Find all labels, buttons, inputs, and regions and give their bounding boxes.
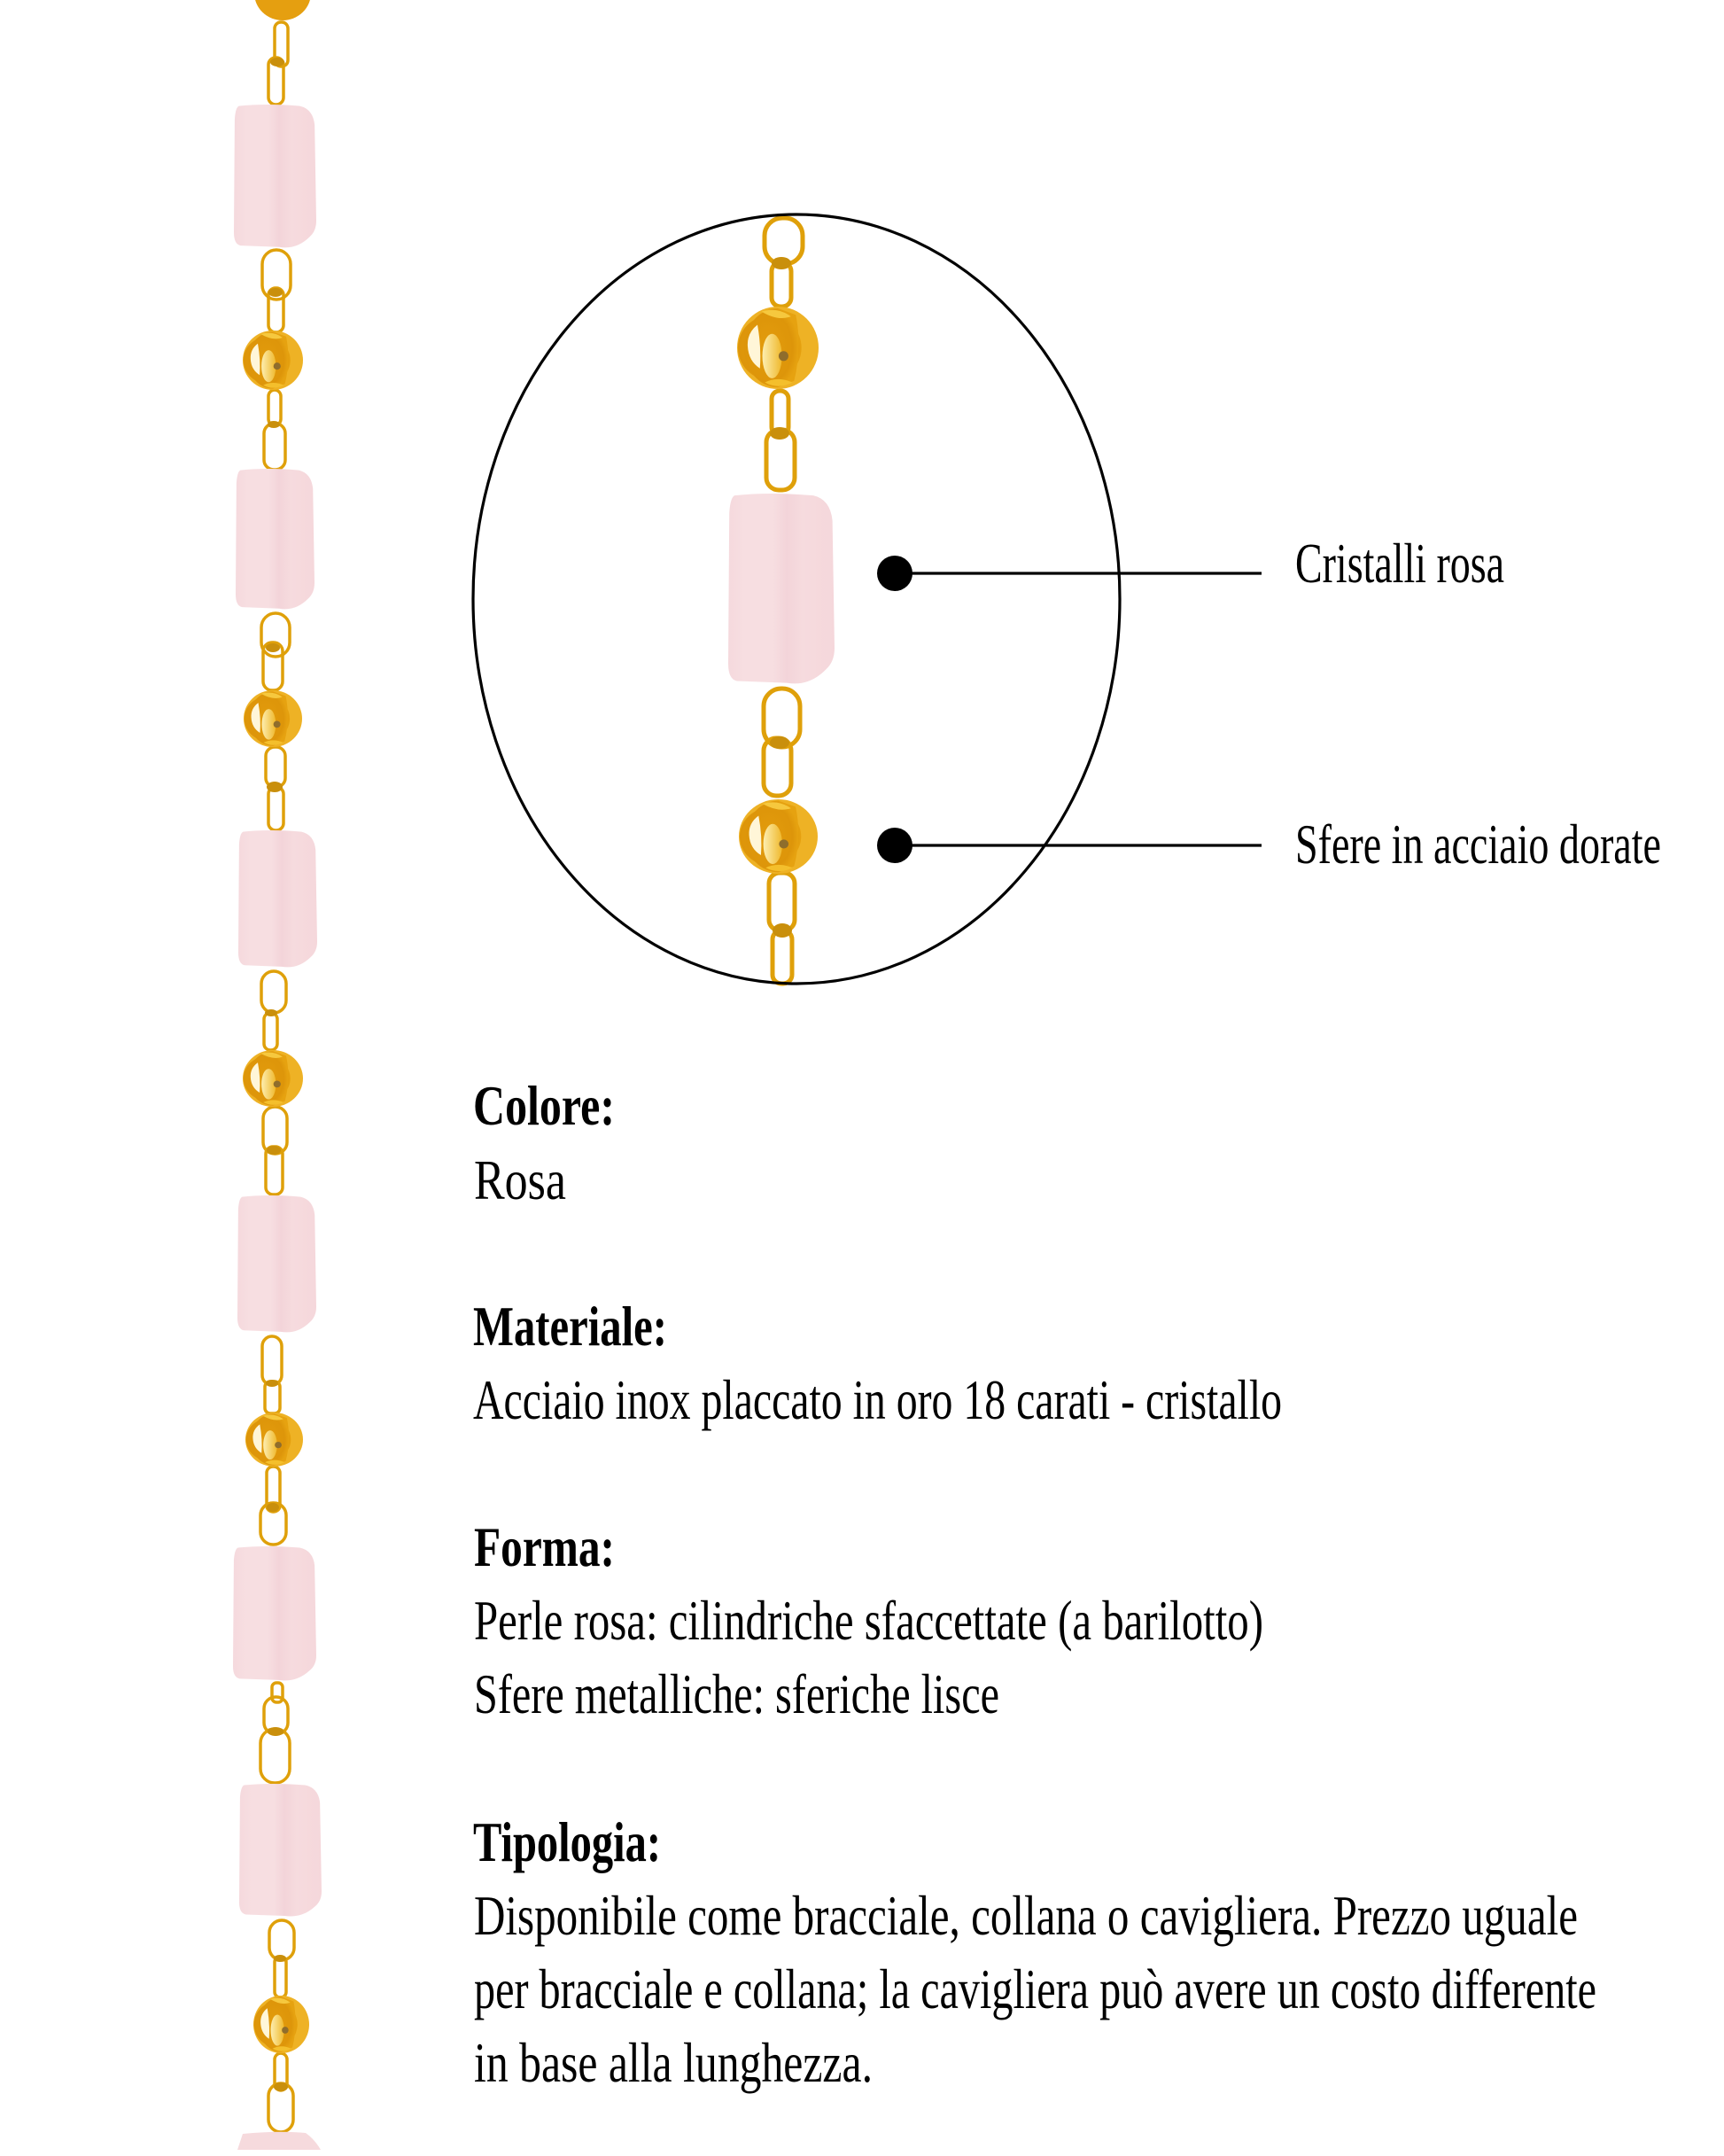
left vertical chain bbox=[233, 0, 322, 2150]
section: tipologia: Tipologia: bbox=[473, 1811, 661, 1873]
pink crystal 5 bbox=[233, 1546, 316, 1680]
gold sphere 4 bbox=[245, 1413, 303, 1467]
section: materiale: Materiale: bbox=[473, 1296, 667, 1358]
callout: sfere in acciaio dorate bbox=[877, 813, 1661, 876]
pink crystal 6 bbox=[239, 1784, 322, 1917]
pink crystal 2 bbox=[236, 469, 315, 609]
enlarged chain bbox=[728, 218, 835, 984]
gold sphere 3 bbox=[243, 1050, 303, 1107]
section: materiale bbox=[473, 1296, 1282, 1431]
callout: cristalli rosa: Cristalli rosa bbox=[1295, 533, 1504, 595]
pink crystal 4 bbox=[237, 1195, 316, 1332]
pink crystal 7, cut by the edge bbox=[237, 2132, 321, 2150]
section: tipologia: in base alla lunghezza. bbox=[474, 2032, 873, 2094]
gold sphere 5 bbox=[253, 1996, 309, 2053]
oval outline bbox=[473, 214, 1120, 984]
section: colore: Colore: bbox=[473, 1075, 615, 1137]
section: materiale: Acciaio inox placcato in oro 18 carati - cristallo bbox=[473, 1369, 1282, 1431]
callout: cristalli rosa bbox=[877, 533, 1504, 595]
magnified detail oval bbox=[473, 214, 1120, 984]
section: forma bbox=[474, 1516, 1263, 1725]
pink crystal 3 bbox=[238, 830, 317, 967]
section: colore: Rosa bbox=[474, 1149, 566, 1211]
gold sphere 1 bbox=[243, 331, 303, 390]
gold sphere, top edge bbox=[254, 0, 311, 20]
section: forma: Perle rosa: cilindriche sfaccettate (a barilotto) bbox=[474, 1590, 1263, 1652]
pink crystal 1 bbox=[234, 105, 316, 247]
section: colore bbox=[473, 1075, 615, 1211]
section: tipologia bbox=[473, 1811, 1596, 2094]
section: forma: Sfere metalliche: sferiche lisce bbox=[474, 1663, 999, 1725]
section: forma: Forma: bbox=[474, 1516, 615, 1578]
gold sphere 2 bbox=[244, 690, 302, 747]
